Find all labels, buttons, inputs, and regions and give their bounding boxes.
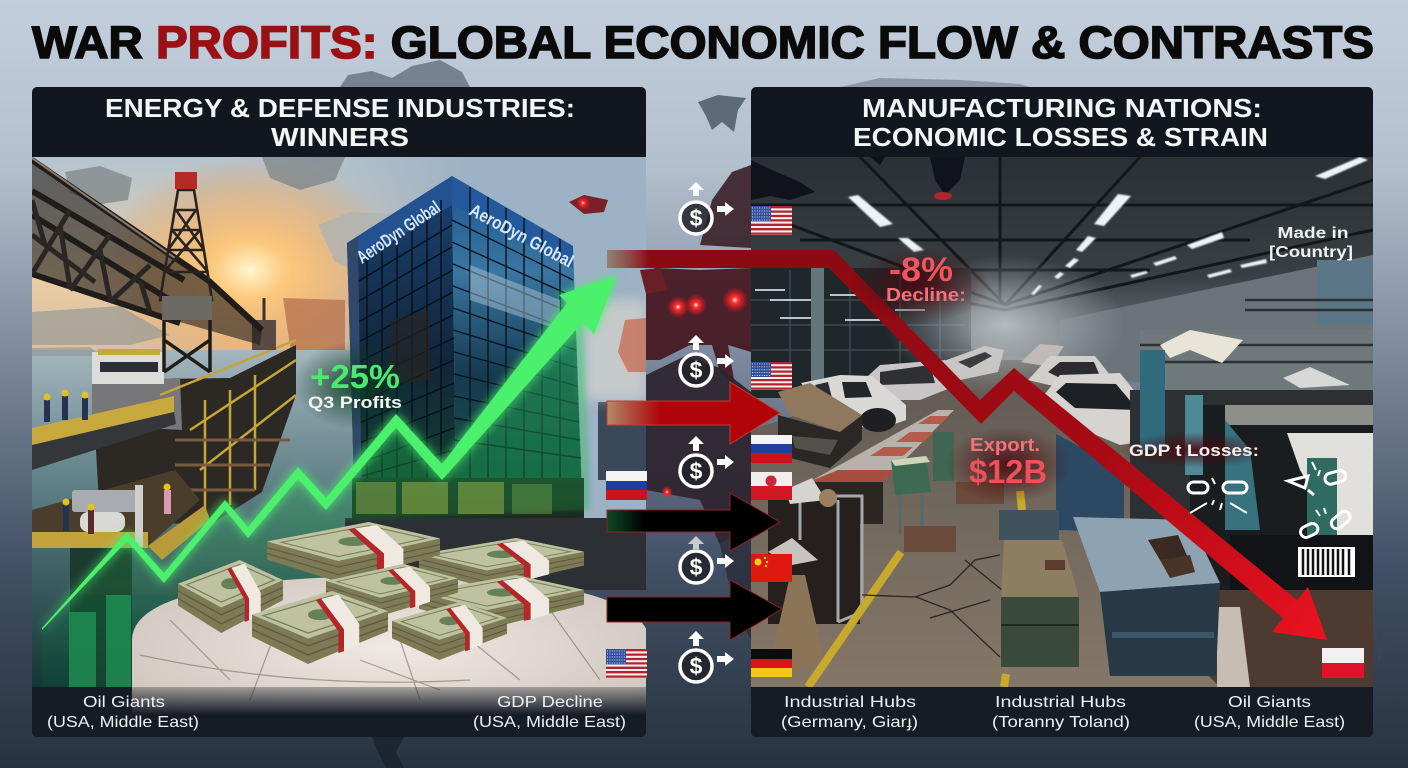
- upper walkway yellow rail: [32, 396, 174, 445]
- marble table: [132, 578, 646, 714]
- label: made in country: [1269, 225, 1353, 261]
- loom machines: [1130, 300, 1373, 590]
- europe landmass: [646, 268, 751, 385]
- heading: energy and defense: WINNERS: [271, 122, 409, 152]
- icon: dollar flow 1: $: [690, 205, 703, 231]
- wheeled cage cart: [768, 478, 862, 624]
- ceiling beams: [751, 157, 1373, 310]
- world map silhouette in background: [340, 60, 1386, 768]
- factory ceiling: [751, 157, 1373, 357]
- scene: street: [345, 518, 646, 590]
- label: made in country: [Country]: [1269, 244, 1353, 261]
- footer bar: [751, 687, 1373, 737]
- caption: oil giants left: Oil Giants: [83, 694, 165, 711]
- cash stacks: [178, 522, 584, 664]
- far window: [1317, 260, 1373, 324]
- scene: sun glow: [124, 161, 370, 350]
- right hall wall: [1060, 255, 1373, 420]
- panel: energy and defense winners: [32, 87, 650, 737]
- window light strips: [755, 290, 925, 320]
- caption: industrial hubs germany: [781, 694, 918, 731]
- heading: energy and defense: [105, 93, 575, 152]
- cash bundle: [326, 564, 458, 616]
- platform pillars: [70, 548, 132, 674]
- arrow: black flow lower: [607, 580, 782, 640]
- icon: dollar flow 3: $: [690, 458, 703, 484]
- icon: dollar flow 4: [680, 536, 734, 583]
- scene: distant clouds and shore: [32, 306, 170, 356]
- stat: +25% Q3 profits: [308, 358, 402, 412]
- chart glow: green fill under line: [42, 322, 590, 688]
- tarped car: [778, 383, 862, 468]
- floor right brown: [1120, 590, 1373, 687]
- caption: oil giants left: (USA, Middle East): [47, 714, 199, 731]
- stat: export $12B: Export.: [970, 435, 1040, 455]
- scene: sea: [32, 350, 362, 690]
- big right car: [1044, 373, 1151, 445]
- arrow: red flow: [607, 382, 780, 444]
- heading: manufacturing nations: ECONOMIC LOSSES & STRAIN: [853, 122, 1268, 152]
- caption: oil giants right: Oil Giants: [1228, 694, 1311, 711]
- column: [811, 268, 824, 393]
- cars far row: [858, 344, 1114, 400]
- glow behind GDP label: [1117, 432, 1273, 468]
- flag: white and red with emblem: [751, 472, 792, 500]
- cash bundle: [392, 602, 507, 660]
- uk: [640, 268, 668, 294]
- caption: GDP decline: GDP Decline: [497, 694, 603, 711]
- stat: +25% Q3 profits: +25%: [310, 358, 400, 395]
- panel: manufacturing nations losses: [751, 87, 1373, 737]
- arrow: black flow upper: [607, 493, 780, 551]
- caption: oil giants right: (USA, Middle East): [1194, 714, 1345, 731]
- flag: poland: [1322, 648, 1364, 678]
- icon: barcode: [1298, 547, 1355, 577]
- icon: dollar flow 5: $: [690, 653, 703, 679]
- slate table: [999, 510, 1059, 540]
- cash bundle: [419, 575, 584, 629]
- caption: industrial hubs germany: Industrial Hubs: [784, 694, 916, 711]
- scandinavia: [700, 165, 751, 248]
- conical tan machine: [768, 538, 826, 667]
- flag: germany: [751, 649, 792, 677]
- scene: glass tower: [347, 176, 584, 519]
- floor: [751, 360, 1373, 687]
- stat: export $12B: $12B: [969, 453, 1047, 490]
- green rising arrow: [42, 276, 616, 630]
- caption: oil giants right: [1194, 694, 1345, 731]
- scene: sky: [32, 170, 420, 350]
- speckled table end: [1217, 607, 1250, 687]
- bridge wheelhouse: [92, 349, 164, 384]
- flag: russia left: [606, 471, 647, 500]
- city lights on map: [576, 196, 748, 498]
- heading: manufacturing nations: MANUFACTURING NATIONS:: [862, 93, 1262, 123]
- icon: dollar flow 2: [680, 335, 734, 386]
- flag: usa 2: [751, 362, 792, 390]
- cash bundle: [178, 560, 283, 633]
- russia map silhouette: [751, 157, 965, 200]
- cash bundle: [252, 591, 388, 664]
- stat: +25% Q3 profits: Q3 Profits: [308, 393, 402, 412]
- footer base: [32, 687, 132, 706]
- map overlay: europe and africa between panels: [618, 165, 751, 640]
- southern africa: [720, 520, 751, 640]
- scene: oil platform deck structure: [32, 298, 296, 690]
- caption: industrial hubs germany: (Germany, Giarɟ): [781, 714, 918, 731]
- chart glow: green columns: [69, 595, 131, 690]
- stat: export $12B: [969, 435, 1047, 490]
- label: made in country: Made in: [1278, 225, 1348, 242]
- icon: dollar flow 3: [680, 436, 734, 487]
- scene: oil derrick: [160, 172, 212, 372]
- flag: usa left: [606, 649, 647, 678]
- white car: [801, 375, 906, 432]
- caption: industrial hubs toland: (Toranny Toland): [992, 714, 1130, 731]
- scene: neighbouring tower: [598, 402, 646, 480]
- tower ground floor: [352, 478, 584, 518]
- icon: dollar flow 1: [680, 182, 734, 234]
- scene: iceland map fragment: [569, 195, 608, 214]
- glow behind export: [946, 427, 1070, 503]
- header bar: [32, 87, 646, 157]
- stat: -8% decline: [886, 251, 966, 305]
- scene: workers: [44, 390, 171, 534]
- green crates: [891, 432, 954, 535]
- damaged conveyor belt: [811, 410, 954, 524]
- icon: dollar flow 5: [680, 631, 734, 682]
- lower deck: [32, 470, 200, 546]
- dark glow behind +25%: [297, 344, 402, 426]
- flag: china: [751, 554, 792, 582]
- caption: oil giants left: [47, 694, 199, 731]
- scene: steel truss bridge: [32, 157, 262, 345]
- icon: broken chain 3: [1299, 508, 1352, 539]
- caption: GDP decline: [473, 694, 626, 731]
- flag: russia: [751, 435, 792, 463]
- brown crates: [904, 482, 1004, 552]
- spain and north-west africa on left: [618, 318, 646, 372]
- north africa: [646, 356, 751, 545]
- red map spot: [934, 192, 952, 200]
- stat: -8% decline: Decline:: [886, 285, 966, 305]
- glow behind -8%: [850, 247, 990, 323]
- header bar: [751, 87, 1373, 157]
- window wall details: [751, 270, 975, 390]
- footer overlay: [132, 687, 646, 737]
- sign: right façade: AeroDyn Global: [466, 200, 577, 272]
- icon: broken chain 1: [1188, 478, 1247, 513]
- scene: right sky and street backdrop: [336, 157, 646, 518]
- ceiling lights: [848, 157, 1368, 295]
- title: WAR PROFITS: GLOBAL ECONOMIC FLOW & CONTRASTS: [32, 17, 1374, 68]
- green storage crate: [1001, 540, 1079, 667]
- icon: dollar flow 2: $: [690, 357, 703, 383]
- caption: industrial hubs toland: [992, 694, 1130, 731]
- caption: industrial hubs toland: Industrial Hubs: [995, 694, 1126, 711]
- heading: manufacturing nations: [853, 93, 1268, 152]
- scene: map continents on sky: [65, 157, 392, 350]
- heading: energy and defense: ENERGY & DEFENSE INDUSTRIES:: [105, 93, 575, 123]
- caption: GDP decline: (USA, Middle East): [473, 714, 626, 731]
- cash bundle: [419, 538, 584, 588]
- arrow: top band and falling red arrow: [607, 250, 1327, 640]
- icon: dollar flow 4: $: [690, 554, 703, 580]
- window wall left: [751, 268, 971, 398]
- floor cracks: [862, 555, 1002, 657]
- label: GDP losses: GDP t Losses:: [1129, 441, 1259, 460]
- blue machine: [1056, 434, 1124, 532]
- blue workbench: [1073, 517, 1220, 676]
- scene: flat sky glare near map edge: [584, 300, 646, 400]
- haze: [885, 255, 1125, 395]
- cash bundle: [267, 522, 440, 582]
- stat: -8% decline: -8%: [889, 251, 953, 289]
- icon: broken chain 2: [1288, 462, 1347, 495]
- flag: usa 1: [751, 206, 792, 235]
- sign: left façade: AeroDyn Global: [353, 197, 444, 267]
- yellow floor lines: [808, 491, 1022, 687]
